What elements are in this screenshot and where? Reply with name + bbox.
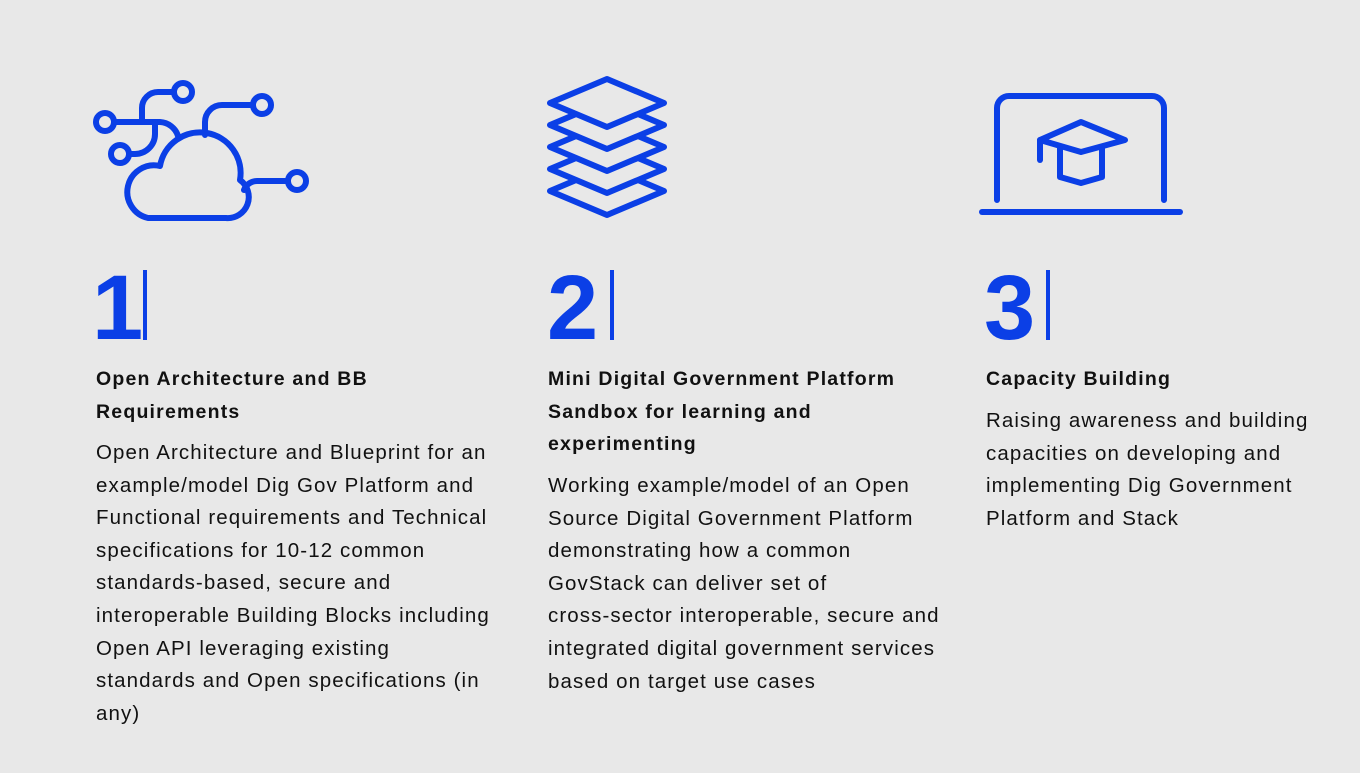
number 1: 1 bbox=[92, 257, 141, 359]
body 1 bbox=[96, 441, 490, 725]
body 1: Open Architecture and Blueprint for an bbox=[96, 441, 487, 464]
heading 1: Requirements bbox=[96, 400, 240, 422]
heading 3: Capacity Building bbox=[986, 368, 1171, 390]
number 3: 3 bbox=[984, 257, 1033, 359]
icons bbox=[93, 76, 1183, 222]
icon: cloud network bbox=[96, 83, 306, 218]
body 2: GovStack can deliver set of bbox=[548, 572, 827, 595]
icon: laptop with graduation cap bbox=[982, 96, 1180, 212]
body 1: standards-based, secure and bbox=[96, 571, 391, 594]
body 1: Open API leveraging existing bbox=[96, 637, 390, 660]
icon: layers bbox=[550, 79, 664, 215]
number 2: 2 bbox=[547, 257, 596, 359]
body 1: Functional requirements and Technical bbox=[96, 506, 487, 529]
body 2: based on target use cases bbox=[548, 670, 816, 693]
body 2: Source Digital Government Platform bbox=[548, 507, 914, 530]
heading 1 bbox=[96, 368, 368, 422]
heading 2: Sandbox for learning and bbox=[548, 400, 812, 422]
body 3: capacities on developing and bbox=[986, 442, 1281, 465]
body 1: specifications for 10-12 common bbox=[96, 539, 425, 562]
body 1: example/model Dig Gov Platform and bbox=[96, 474, 474, 497]
body 2: integrated digital government services bbox=[548, 637, 935, 660]
heading 1: Open Architecture and BB bbox=[96, 368, 368, 390]
body 1: interoperable Building Blocks including bbox=[96, 604, 490, 627]
heading 2: Mini Digital Government Platform bbox=[548, 368, 895, 390]
body 3: Raising awareness and building bbox=[986, 409, 1308, 432]
body 2: demonstrating how a common bbox=[548, 539, 851, 562]
body 2: cross-sector interoperable, secure and bbox=[548, 604, 940, 627]
body 3: Platform and Stack bbox=[986, 507, 1179, 530]
body 3: implementing Dig Government bbox=[986, 474, 1293, 497]
column 1 bbox=[92, 257, 490, 725]
body 1: standards and Open specifications (in bbox=[96, 669, 480, 692]
body 2: Working example/model of an Open bbox=[548, 474, 910, 497]
column 2 bbox=[547, 257, 940, 693]
body 3 bbox=[986, 409, 1308, 530]
heading 2: experimenting bbox=[548, 433, 697, 455]
body 2 bbox=[548, 474, 940, 693]
column 3 bbox=[984, 257, 1308, 530]
body 1: any) bbox=[96, 702, 140, 725]
heading 2 bbox=[548, 368, 895, 455]
